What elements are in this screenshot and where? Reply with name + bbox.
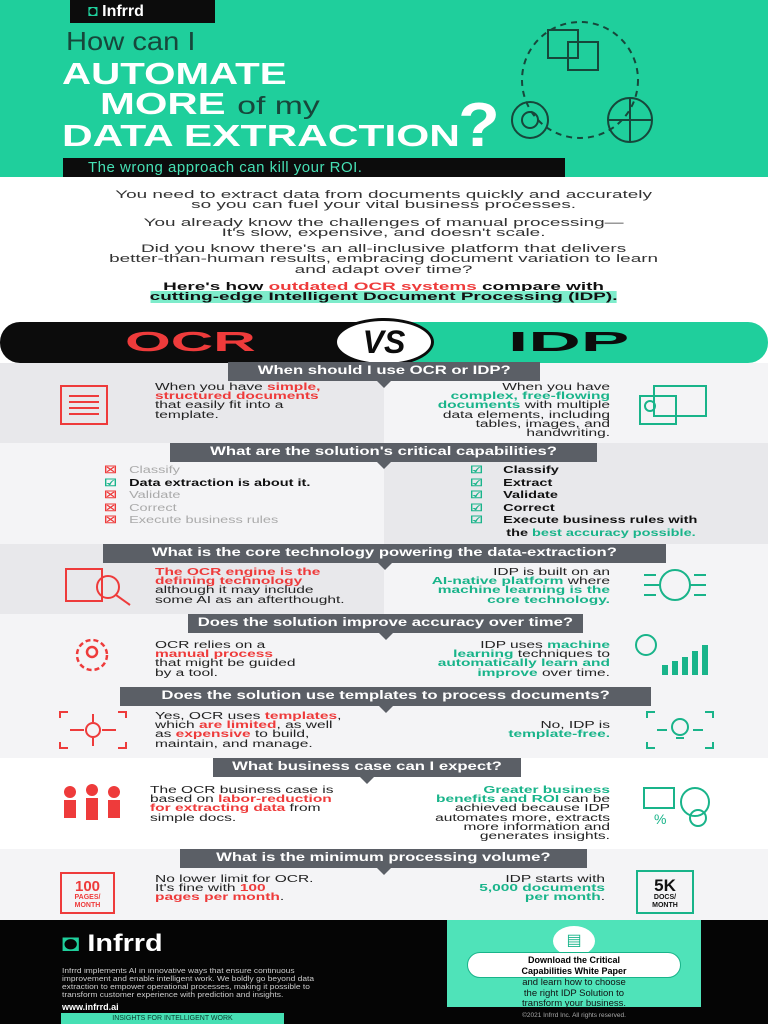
footer text: improvement and enable intelligent work. We boldly go beyond data (62, 976, 314, 983)
CTA box: Capabilities White Paper (521, 966, 627, 976)
logo (70, 0, 215, 23)
icon: gear person (76, 638, 108, 672)
title: MORE of my (100, 86, 320, 121)
IDP capabilities (470, 465, 697, 539)
section 1 heading: When should I use OCR or IDP? (258, 365, 510, 377)
IDP capabilities: ☑ Classify (470, 465, 559, 476)
IDP text 4 (438, 640, 610, 679)
IDP text 3: machine learning is the (438, 585, 610, 596)
section 5 heading: Does the solution use templates to process documents? (161, 690, 610, 702)
icon: AI brain (644, 569, 706, 601)
OCR capabilities (104, 465, 310, 526)
OCR text 6 (150, 785, 334, 824)
OCR text 1: structured documents (155, 391, 319, 402)
IDP text 4: learning techniques to (453, 649, 610, 660)
icon: 100 pages: 100 (75, 878, 100, 895)
copyright: ©2021 Infrrd Inc. All rights reserved. (522, 1012, 626, 1019)
OCR text 3: although it may include (155, 585, 314, 596)
icon: OCR document (60, 385, 108, 425)
title (62, 26, 500, 160)
OCR text 4: OCR relies on a (155, 640, 265, 651)
OCR text 3: some AI as an afterthought. (155, 595, 345, 606)
OCR text 6: The OCR business case is (150, 785, 334, 796)
OCR text 6: for extracting data from (150, 803, 321, 814)
IDP capabilities: the best accuracy possible. (506, 528, 696, 539)
section 1 heading (228, 362, 540, 381)
icon: 5K docs: DOCS/ (654, 894, 676, 901)
IDP text 7: per month. (525, 892, 605, 903)
logo: ◘ Infrrd (88, 3, 144, 20)
OCR text 6: simple docs. (150, 813, 236, 824)
icon: template (59, 711, 127, 749)
IDP text 1 (438, 382, 610, 439)
OCR text 5: Yes, OCR uses templates, (155, 711, 341, 722)
IDP text 5: No, IDP is (540, 720, 610, 731)
section 3 heading (103, 544, 666, 563)
icon: 5K docs (636, 870, 694, 914)
intro text: Here's how outdated OCR systems compare with (163, 281, 604, 293)
OCR text 5: maintain, and manage. (155, 739, 313, 750)
IDP text 6: more information and (464, 822, 610, 833)
intro text: so you can fuel your vital business processes. (191, 199, 576, 211)
intro text: You already know the challenges of manual processing— (144, 217, 624, 229)
IDP text 4: IDP uses machine (480, 640, 610, 651)
OCR text 7 (155, 874, 313, 903)
intro text: It's slow, expensive, and doesn't scale. (222, 227, 545, 239)
IDP text 7: 5,000 documents (479, 883, 605, 894)
header background (0, 0, 768, 177)
section 2 heading (170, 443, 597, 462)
OCR text 5: as expensive to build, (155, 729, 309, 740)
IDP text 6: Greater business (483, 785, 610, 796)
VS bar: IDP (508, 326, 629, 357)
OCR text 1: that easily fit into a (155, 400, 283, 411)
OCR text 5: which are limited, as well (155, 720, 332, 731)
IDP text 6: automates more, extracts (435, 813, 610, 824)
IDP capabilities: ☑ Correct (470, 503, 555, 514)
intro text: cutting-edge Intelligent Document Processing (IDP). (150, 291, 617, 303)
icon: ROI: % (654, 811, 666, 827)
icon: people (64, 784, 120, 820)
OCR text 3: The OCR engine is the (155, 567, 320, 578)
IDP text 3 (432, 567, 610, 606)
CTA box (447, 920, 701, 1007)
section 7 heading (180, 849, 587, 868)
icon: ROI (643, 787, 710, 827)
footer url: www.infrrd.ai (62, 1002, 119, 1012)
section 2 heading: What are the solution's critical capabilities? (210, 446, 557, 458)
icon: IDP document (639, 385, 707, 425)
OCR text 4: manual process (155, 649, 273, 660)
OCR capabilities: ☒ Classify (104, 465, 180, 476)
OCR text 1: When you have simple, (155, 382, 320, 393)
intro text: Did you know there's an all-inclusive platform that delivers (141, 243, 626, 255)
IDP text 1: data elements, including (443, 410, 610, 421)
VS bar (0, 318, 768, 363)
IDP text 1: When you have (502, 382, 610, 393)
IDP text 7 (479, 874, 605, 903)
OCR capabilities: ☑ Data extraction is about it. (104, 478, 310, 489)
IDP text 3: AI-native platform where (432, 576, 610, 587)
section 3 heading: What is the core technology powering the data-extraction? (152, 547, 617, 559)
IDP text 1: documents with multiple (438, 400, 610, 411)
title: How can I (66, 26, 195, 56)
VS bar: OCR (125, 326, 256, 357)
IDP text 6: achieved because IDP (455, 803, 610, 814)
section 6 heading: What business case can I expect? (232, 761, 502, 773)
CTA box: and learn how to choose (522, 977, 626, 988)
OCR text 6: based on labor-reduction (150, 794, 332, 805)
IDP text 6: benefits and ROI can be (436, 794, 610, 805)
CTA box: ▤ (566, 932, 582, 949)
IDP capabilities: ☑ Extract (470, 478, 552, 489)
subtitle bar: The wrong approach can kill your ROI. (88, 159, 362, 176)
OCR text 4: by a tool. (155, 668, 218, 679)
CTA box: the right IDP Solution to (524, 988, 624, 998)
OCR text 1 (155, 382, 320, 421)
IDP text 1: tables, images, and (476, 419, 610, 430)
footer tagline (61, 1013, 284, 1024)
OCR capabilities: ☒ Correct (104, 503, 177, 514)
title: ? (458, 91, 500, 160)
footer text: extraction to empower operational processes, making it possible to (62, 984, 310, 991)
footer text: transform customer experience with prediction and insights. (62, 992, 283, 999)
section 5 heading (120, 687, 651, 706)
IDP text 1: handwriting. (526, 428, 610, 439)
section backgrounds (0, 363, 384, 443)
OCR text 5 (155, 711, 341, 750)
section 6 heading (213, 758, 521, 777)
IDP text 3: core technology. (487, 595, 610, 606)
IDP text 5 (508, 720, 610, 740)
icon: 5K docs: 5K (654, 876, 676, 895)
title: AUTOMATE (62, 56, 287, 91)
intro text: and adapt over time? (295, 264, 472, 276)
footer text: Infrrd implements AI in innovative ways that ensure continuous (62, 968, 295, 975)
OCR text 3: defining technology (155, 576, 302, 587)
title: DATA EXTRACTION (62, 118, 460, 153)
footer text (62, 968, 314, 999)
section 4 heading (188, 614, 583, 633)
icon: magnifier doc (65, 568, 130, 606)
CTA box: Download the Critical (528, 955, 620, 965)
icon: 100 pages: PAGES/ (75, 894, 100, 901)
OCR capabilities: ☒ Execute business rules (104, 515, 278, 526)
OCR text 4: that might be guided (155, 658, 295, 669)
VS bar: VS (363, 324, 405, 360)
section 4 heading: Does the solution improve accuracy over time? (198, 617, 573, 629)
footer logo: ◘ Infrrd (62, 930, 163, 957)
OCR text 1: template. (155, 410, 219, 421)
icon: bulb (646, 711, 714, 749)
subtitle bar (63, 158, 565, 177)
OCR text 7: pages per month. (155, 892, 284, 903)
IDP text 4: improve over time. (477, 668, 610, 679)
header icons (511, 21, 653, 143)
icon: chart (635, 634, 708, 675)
intro text: You need to extract data from documents quickly and accurately (115, 189, 652, 201)
IDP text 5: template-free. (508, 729, 610, 740)
icon: 100 pages: MONTH (75, 902, 100, 909)
OCR text 7: No lower limit for OCR. (155, 874, 313, 885)
IDP text 4: automatically learn and (438, 658, 610, 669)
intro text (109, 189, 658, 303)
CTA box: transform your business. (522, 998, 626, 1009)
icon: 5K docs: MONTH (652, 902, 678, 909)
intro text: better-than-human results, embracing document variation to learn (109, 253, 658, 265)
section 7 heading: What is the minimum processing volume? (216, 852, 551, 864)
OCR text 3 (155, 567, 345, 606)
IDP text 6 (435, 785, 610, 842)
IDP text 6: generates insights. (480, 831, 610, 842)
IDP capabilities: ☑ Validate (470, 490, 558, 501)
IDP text 1: complex, free-flowing (451, 391, 610, 402)
IDP capabilities: ☑ Execute business rules with (470, 515, 697, 526)
icon: 100 pages (60, 872, 115, 914)
OCR text 7: It's fine with 100 (155, 883, 266, 894)
OCR capabilities: ☒ Validate (104, 490, 180, 501)
OCR text 4 (155, 640, 295, 679)
footer tagline: INSIGHTS FOR INTELLIGENT WORK (112, 1015, 233, 1022)
footer (0, 920, 768, 1024)
IDP text 7: IDP starts with (505, 874, 605, 885)
IDP text 3: IDP is built on an (493, 567, 610, 578)
